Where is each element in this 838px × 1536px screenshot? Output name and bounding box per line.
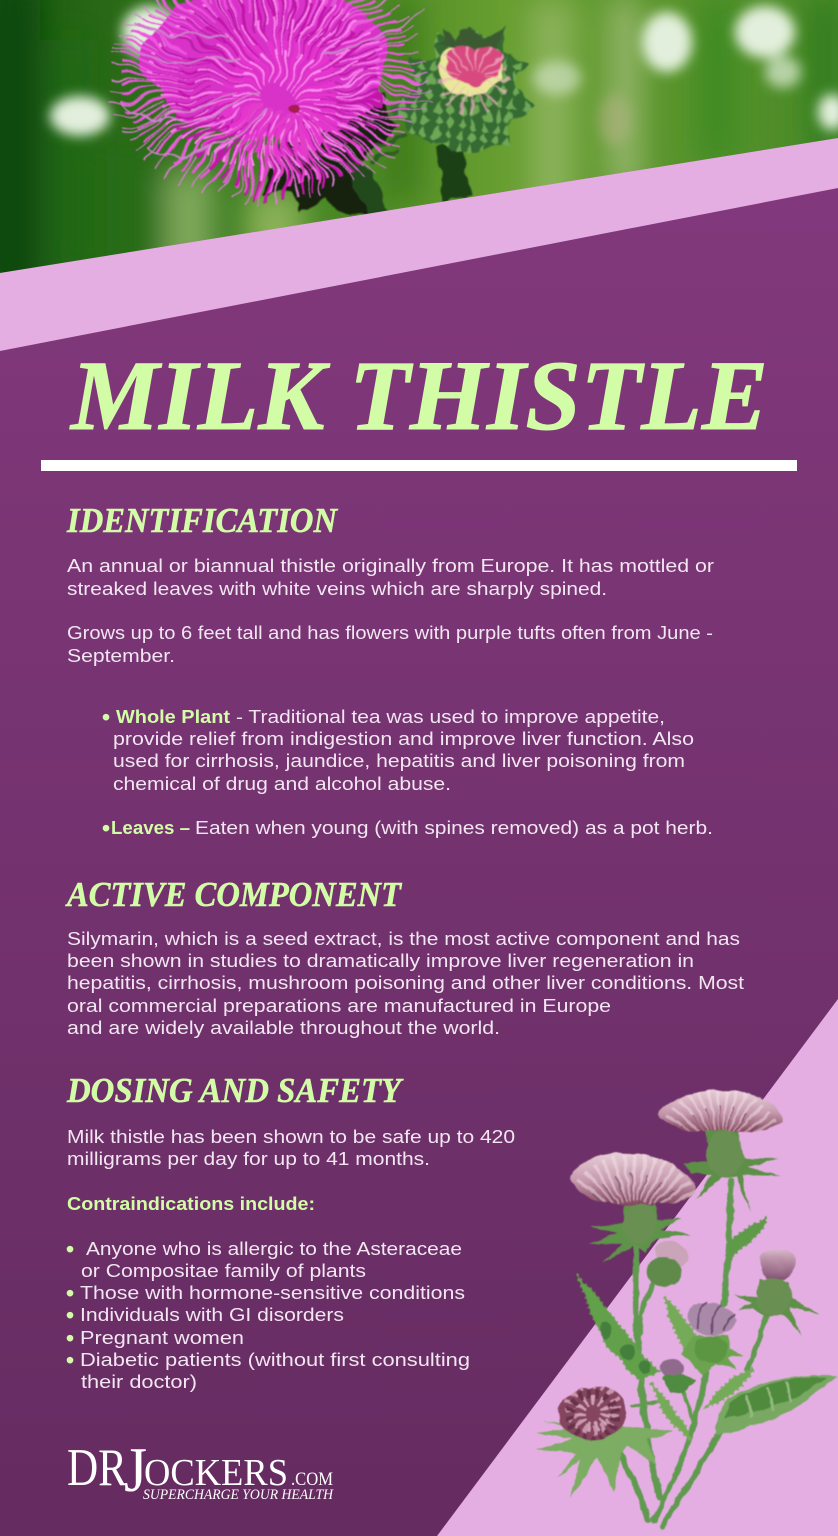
bud (392, 25, 532, 152)
leaf: big right (716, 1375, 837, 1435)
bud: small (659, 1359, 697, 1393)
contraindications list: Individuals with GI disorders (80, 1304, 344, 1325)
text block: identification description: streaked leaves with white veins which are sharply spined. (67, 578, 607, 599)
heading: identification: IDENTIFICATION (66, 501, 339, 540)
bullet: whole plant (102, 704, 694, 794)
stems (620, 1180, 767, 1525)
bud: left (647, 1237, 692, 1286)
contraindications list: their doctor) (81, 1371, 197, 1392)
bullet: leaves: Leaves – (111, 818, 190, 838)
contraindications list (66, 1236, 470, 1392)
contraindications list: • (66, 1302, 74, 1328)
bud: center (680, 1302, 743, 1375)
text block: identification description: Grows up to 6 feet tall and has flowers with purple tufts often from June - (67, 622, 713, 643)
watercolor thistle plant illustration (535, 1090, 837, 1525)
bloom top (658, 1090, 783, 1213)
text block: dosing: milligrams per day for up to 41 months. (67, 1148, 430, 1169)
logo: DrJockers.com: DR (67, 1439, 128, 1497)
contraindications list: • (66, 1347, 74, 1373)
pink diagonal band (0, 138, 838, 351)
bullet: leaves: Eaten when young (with spines removed) as a pot herb. (195, 817, 713, 838)
bullet: whole plant: used for cirrhosis, jaundice, hepatitis and liver poisoning from (113, 750, 685, 771)
logo: DrJockers.com: SUPERCHARGE YOUR HEALTH (143, 1487, 334, 1503)
bullet: leaves (102, 815, 713, 841)
text block: active component: been shown in studies to dramatically improve liver regeneration in (67, 950, 694, 971)
contraindications list: Those with hormone-sensitive conditions (80, 1282, 465, 1303)
leaf: upper right small (727, 1217, 767, 1256)
contraindications list: • (66, 1236, 74, 1262)
heading: dosing and safety: DOSING AND SAFETY (66, 1071, 404, 1110)
text block: identification description: September. (67, 645, 175, 666)
title: MILK THISTLE (69, 340, 768, 451)
text block: active component: and are widely available throughout the world. (67, 1017, 500, 1038)
leaf: small lower right (707, 1368, 753, 1407)
bullet: whole plant: • (102, 704, 110, 730)
heading: active component: ACTIVE COMPONENT (65, 875, 402, 914)
bud: right (733, 1249, 819, 1337)
text block: dosing (67, 1126, 515, 1169)
text block: identification description (67, 555, 714, 666)
flower calyx and stem (262, 95, 405, 215)
leaf: mid (665, 1297, 710, 1370)
white divider bar (41, 460, 797, 471)
bullet: whole plant: chemical of drug and alcohol abuse. (113, 773, 451, 794)
logo: DrJockers.com: OCKERS (144, 1452, 288, 1494)
logo: DrJockers.com: .COM (291, 1469, 333, 1490)
bud stem (436, 146, 472, 200)
bullet: whole plant: - Traditional tea was used to improve appetite, (236, 706, 665, 727)
text block: active component: hepatitis, cirrhosis, mushroom poisoning and other liver conditions. Most (67, 972, 744, 993)
text block: identification description: An annual or biannual thistle originally from Europe. It has mottled or (67, 555, 714, 576)
bloom bottom left (535, 1383, 673, 1497)
photo: thistle flower and bud (0, 0, 838, 300)
contraindications list: Diabetic patients (without first consulting (80, 1349, 470, 1370)
contraindications heading: Contraindications include: (67, 1194, 315, 1214)
contraindications list: • (66, 1325, 74, 1351)
bullet: leaves: • (102, 815, 110, 841)
logo: DrJockers.com: J (124, 1434, 147, 1505)
pink bottom-right triangle (437, 999, 838, 1536)
contraindications list: Pregnant women (80, 1327, 244, 1348)
logo: DrJockers.com (67, 1434, 334, 1505)
contraindications list: Anyone who is allergic to the Asteraceae (86, 1238, 462, 1259)
contraindications list: • (66, 1280, 74, 1306)
bullet: whole plant: Whole Plant (116, 707, 230, 727)
leaf: long left (577, 1275, 658, 1380)
text block: active component: oral commercial preparations are manufactured in Europe (67, 995, 611, 1016)
bullet: whole plant: provide relief from indigestion and improve liver function. Also (113, 728, 694, 749)
text block: active component: Silymarin, which is a seed extract, is the most active component and has (67, 928, 740, 949)
bloom left (570, 1153, 695, 1277)
flower head (112, 0, 422, 195)
text block: active component (67, 928, 744, 1038)
text block: dosing: Milk thistle has been shown to be safe up to 420 (67, 1126, 515, 1147)
leaf: small lower mid (652, 1383, 692, 1440)
contraindications list: or Compositae family of plants (81, 1260, 366, 1281)
